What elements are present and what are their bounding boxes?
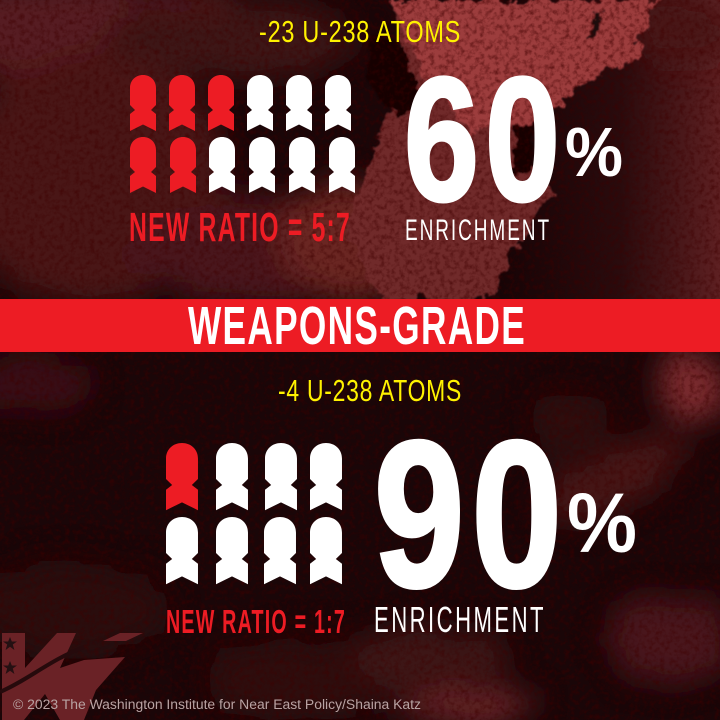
section: 90 percent enrichment xyxy=(166,373,637,640)
pictogram: twelve atoms, five red and seven white xyxy=(130,75,355,193)
section: 60 percent enrichment xyxy=(129,14,623,250)
banner: weapons-grade: WEAPONS-GRADE xyxy=(188,296,526,356)
heading: atoms removed: -23 U-238 ATOMS xyxy=(259,14,461,49)
stat: percent sign: % xyxy=(565,113,623,191)
stat: percent sign: % xyxy=(567,476,637,570)
footer credit: © 2023 The Washington Institute for Near East Policy/Shaina Katz xyxy=(13,697,421,712)
pictogram: eight atoms, one red and seven white xyxy=(166,443,342,584)
label: new ratio 1:7: NEW RATIO = 1:7 xyxy=(166,603,346,640)
heading: atoms removed: -4 U-238 ATOMS xyxy=(278,373,462,408)
stat: 90: 90 xyxy=(374,399,569,631)
stat: 60: 60 xyxy=(404,42,566,238)
logo watermark: Washington Institute xyxy=(0,633,143,720)
label: new ratio 5:7: NEW RATIO = 5:7 xyxy=(129,204,351,250)
icon: stars xyxy=(3,637,17,674)
label: enrichment: ENRICHMENT xyxy=(374,599,546,640)
label: enrichment: ENRICHMENT xyxy=(405,214,551,247)
